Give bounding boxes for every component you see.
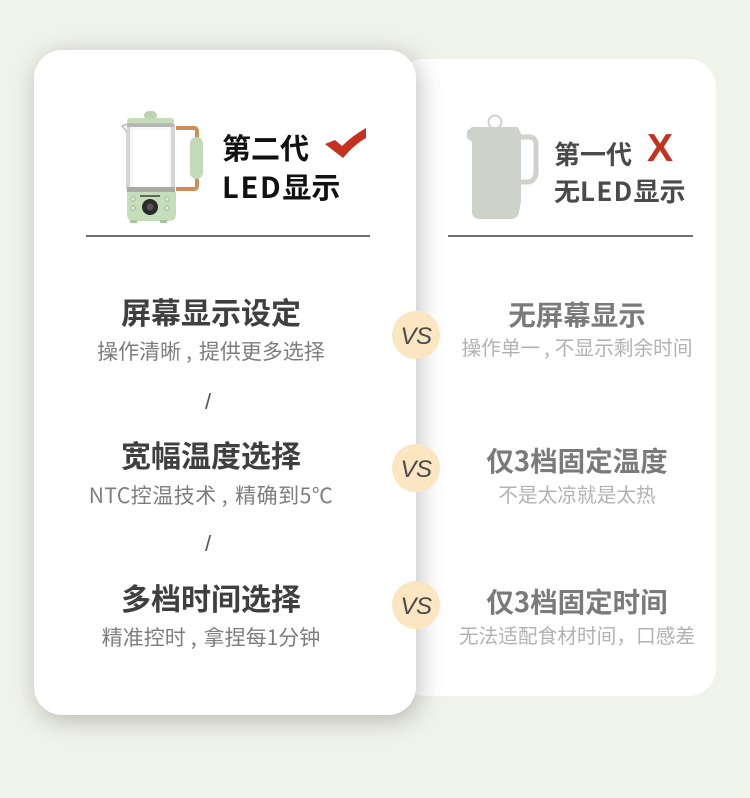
row 3 left heading: 多档时间选择 <box>121 575 301 619</box>
icon: red check mark <box>325 128 366 158</box>
divider: left <box>86 235 370 237</box>
row 2 left description: NTC控温技术, 精确到5℃ <box>89 480 333 510</box>
icon: red X: X <box>647 127 673 170</box>
row 1 right heading: 无屏幕显示 <box>508 293 646 333</box>
icon: green kettle <box>121 111 203 223</box>
VS badge 1 <box>392 311 440 359</box>
icon: grey kettle silhouette <box>467 114 538 219</box>
VS badge 2 <box>392 444 440 492</box>
separator slash: / <box>205 531 211 556</box>
row 1 left heading: 屏幕显示设定 <box>121 289 301 333</box>
row 3 left description: 精准控时, 拿捏每1分钟 <box>102 622 320 652</box>
VS badge 3: VS <box>400 593 432 620</box>
row 2 left heading: 宽幅温度选择 <box>121 432 301 476</box>
heading: second generation: 第二代 <box>222 126 309 168</box>
row 3 right description: 无法适配食材时间，口感差 <box>459 620 695 649</box>
panel: second generation card <box>34 50 416 715</box>
panel: first generation card <box>396 59 716 696</box>
VS badge 3 <box>392 581 440 629</box>
separator slash: / <box>205 389 211 414</box>
heading: LED display: LED显示 <box>222 165 340 207</box>
row 1 left description: 操作清晰, 提供更多选择 <box>97 336 325 366</box>
row 1 right description: 操作单一, 不显示剩余时间 <box>461 332 693 361</box>
heading: first generation: 第一代 <box>554 135 632 172</box>
row 2 right heading: 仅3档固定温度 <box>486 439 668 479</box>
row 2 right description: 不是太凉就是太热 <box>498 479 656 508</box>
heading: no LED display: 无LED显示 <box>554 172 686 209</box>
row 3 right heading: 仅3档固定时间 <box>486 580 668 620</box>
divider: right <box>448 235 693 237</box>
VS badge 1: VS <box>400 323 432 350</box>
VS badge 2: VS <box>400 456 432 483</box>
